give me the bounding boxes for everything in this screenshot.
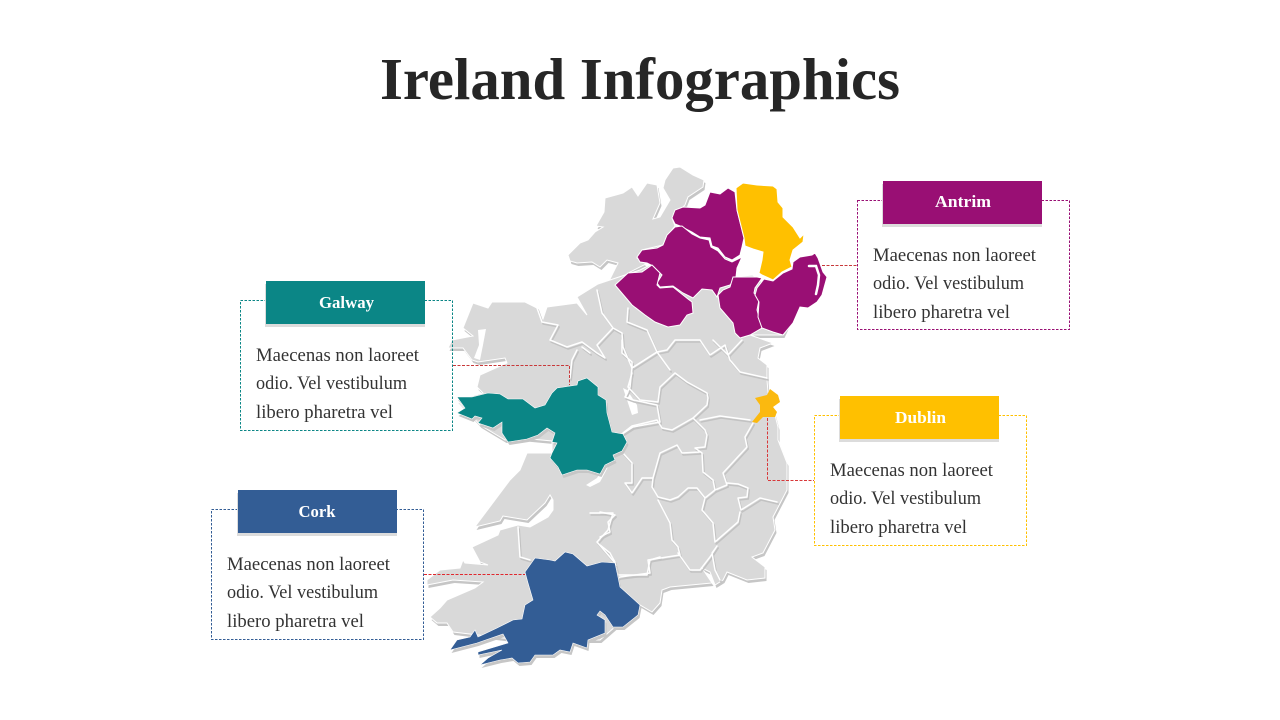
heading: Antrim: Antrim [935, 192, 991, 211]
text: Antrim body [873, 245, 1037, 323]
county: Derry [672, 188, 744, 260]
text: Cork body [227, 554, 391, 632]
county: Fermanagh [615, 265, 693, 327]
text: Galway body: libero pharetra vel [256, 402, 393, 423]
text: Cork body: Maecenas non laoreet [227, 554, 391, 575]
county: Cork [450, 552, 640, 665]
text: Galway body [256, 345, 420, 423]
panel: Cork [212, 490, 424, 640]
county: Galway shadow [458, 381, 628, 478]
text: Dublin body: Maecenas non laoreet [830, 460, 994, 481]
county borders shadow [519, 292, 778, 582]
county: Tyrone [637, 226, 742, 298]
county: Down [755, 253, 827, 335]
county: Galway [457, 378, 627, 475]
text: Dublin body: odio. Vel vestibulum [830, 488, 981, 509]
county: Antrim [736, 183, 804, 280]
connector: Cork [424, 574, 525, 576]
text: Antrim body: libero pharetra vel [873, 302, 1010, 323]
text: Dublin body: libero pharetra vel [830, 517, 967, 538]
heading: Cork: Cork [298, 502, 336, 521]
map of Ireland [427, 167, 827, 668]
white cover for Lough Neagh [735, 247, 764, 277]
text: Dublin body [830, 460, 994, 538]
text: Galway body: Maecenas non laoreet [256, 345, 420, 366]
county: Cork shadow [452, 555, 642, 668]
connector: Antrim [822, 264, 857, 266]
land shadow [428, 170, 792, 643]
Strangford Lough [809, 266, 819, 294]
panel: Galway [240, 281, 452, 430]
county borders [518, 290, 777, 580]
text: Cork body: libero pharetra vel [227, 611, 364, 632]
county: Dublin [752, 389, 780, 423]
heading: Dublin: Dublin [895, 408, 947, 427]
title: Ireland Infographics [380, 46, 900, 112]
text: Antrim body: odio. Vel vestibulum [873, 273, 1024, 294]
connector: Dublin [768, 418, 814, 480]
inland water [474, 329, 638, 487]
connector: Galway [453, 366, 570, 385]
panel: Antrim [858, 181, 1070, 330]
text: Cork body: odio. Vel vestibulum [227, 582, 378, 603]
text: Antrim body: Maecenas non laoreet [873, 245, 1037, 266]
heading: Galway: Galway [319, 293, 374, 312]
county: Armagh [718, 277, 762, 338]
grey counties [427, 167, 790, 640]
text: Galway body: odio. Vel vestibulum [256, 373, 407, 394]
panel: Dublin [814, 396, 1026, 546]
